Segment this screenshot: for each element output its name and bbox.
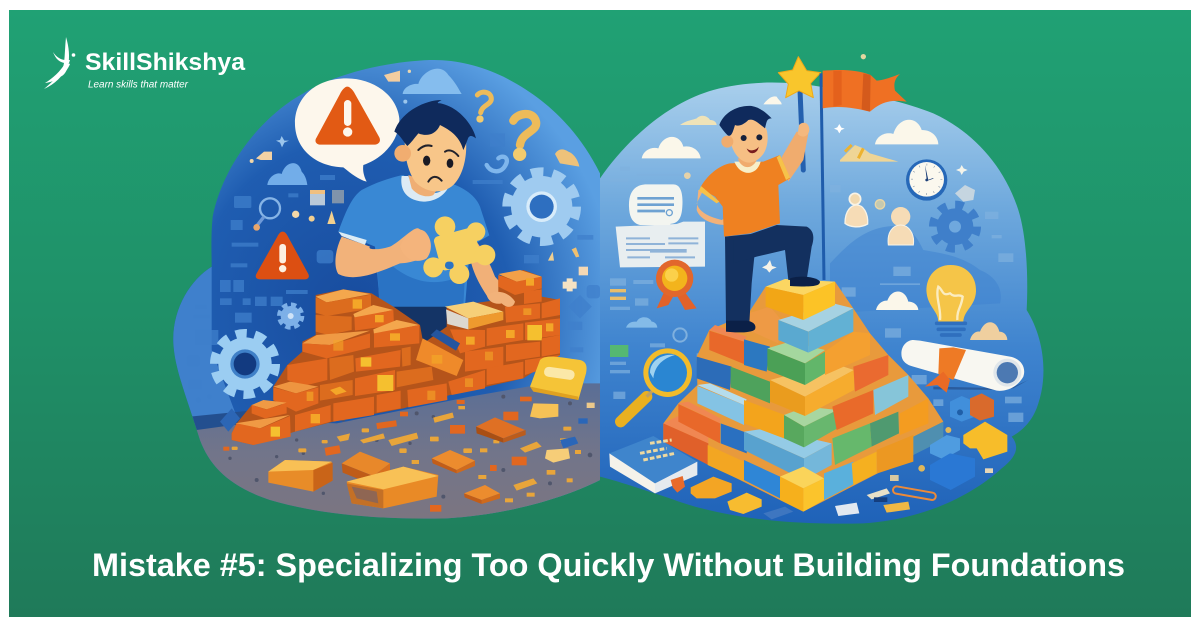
icon: leaping figure: [44, 37, 75, 89]
puzzle piece: [423, 216, 495, 284]
loose pale brick: [445, 302, 503, 329]
icon: gear large: [508, 173, 575, 240]
arm left: [335, 228, 430, 277]
icon: warning triangle large: [315, 87, 380, 145]
brand logo: [44, 37, 246, 90]
hand on wall: [487, 292, 515, 307]
icon: people: [845, 193, 914, 245]
icon: cloud upper: [403, 69, 462, 94]
lower left lighter bump: [173, 267, 237, 420]
title: Mistake #5: Specializing Too Quickly Without Building Foundations: [92, 547, 1125, 583]
icon: award ribbon: [656, 260, 697, 310]
blob background: [173, 60, 600, 519]
arm right: [470, 237, 513, 308]
flag on pole: [821, 70, 907, 280]
icon: open book: [609, 436, 697, 493]
neck: [408, 175, 439, 196]
panel: wrong approach, crumbling wall: [173, 60, 603, 523]
panel: right approach, solid foundation: [600, 54, 1043, 524]
icon: magnifying glass: [621, 348, 692, 422]
floor with rubble: [190, 383, 603, 523]
wand with star: [778, 57, 821, 170]
icon: magnifier: [253, 198, 280, 231]
icon: certificate documents: [616, 184, 705, 267]
icon: warning triangle small: [256, 232, 309, 279]
hair: [719, 106, 772, 136]
collar: [401, 176, 449, 202]
face: [423, 156, 430, 166]
neck and collar: [734, 162, 761, 173]
small desk objects: [763, 486, 936, 519]
pyramid of blocks: [663, 279, 943, 512]
blocks and objects at right: [890, 393, 1007, 490]
icon: diploma scroll: [901, 340, 1028, 393]
tagline: Learn skills that matter: [88, 80, 189, 90]
hair: [394, 100, 476, 150]
icon: cloud left: [267, 163, 307, 185]
icon: wall clock: [906, 159, 947, 201]
legs: [377, 303, 457, 347]
shirt: [700, 155, 790, 237]
sleeve trim: [338, 232, 367, 245]
icon: question marks: [476, 92, 536, 171]
person: happy boy: [697, 57, 821, 332]
icon: gear lower left: [216, 335, 274, 393]
icon: clouds: [626, 96, 1007, 340]
floating background shapes: [610, 54, 1023, 422]
hand holding puzzle: [400, 230, 431, 261]
head: [730, 119, 768, 163]
fallen yellow slab: [530, 357, 587, 400]
arm raised: [780, 132, 808, 182]
brand name: SkillShikshya: [85, 49, 246, 76]
icon: gear background: [934, 206, 976, 247]
person: worried man: [335, 100, 513, 347]
shirt: [338, 175, 489, 307]
shoes: [726, 321, 755, 332]
speech bubble with warning: [295, 78, 399, 182]
blob background: [600, 83, 1043, 524]
floating background shapes: [187, 70, 600, 403]
arm left: [697, 190, 737, 225]
icon: light bulb: [926, 265, 976, 335]
raised leg: [733, 225, 813, 280]
brick wall: [220, 270, 560, 445]
head: [405, 120, 466, 191]
icon: gear small: [280, 305, 301, 327]
face: [741, 135, 747, 141]
small yellow blocks: [691, 477, 762, 514]
tilted broken brick: [416, 329, 463, 376]
back leg: [725, 233, 757, 323]
fallen bricks on floor: [268, 403, 570, 508]
